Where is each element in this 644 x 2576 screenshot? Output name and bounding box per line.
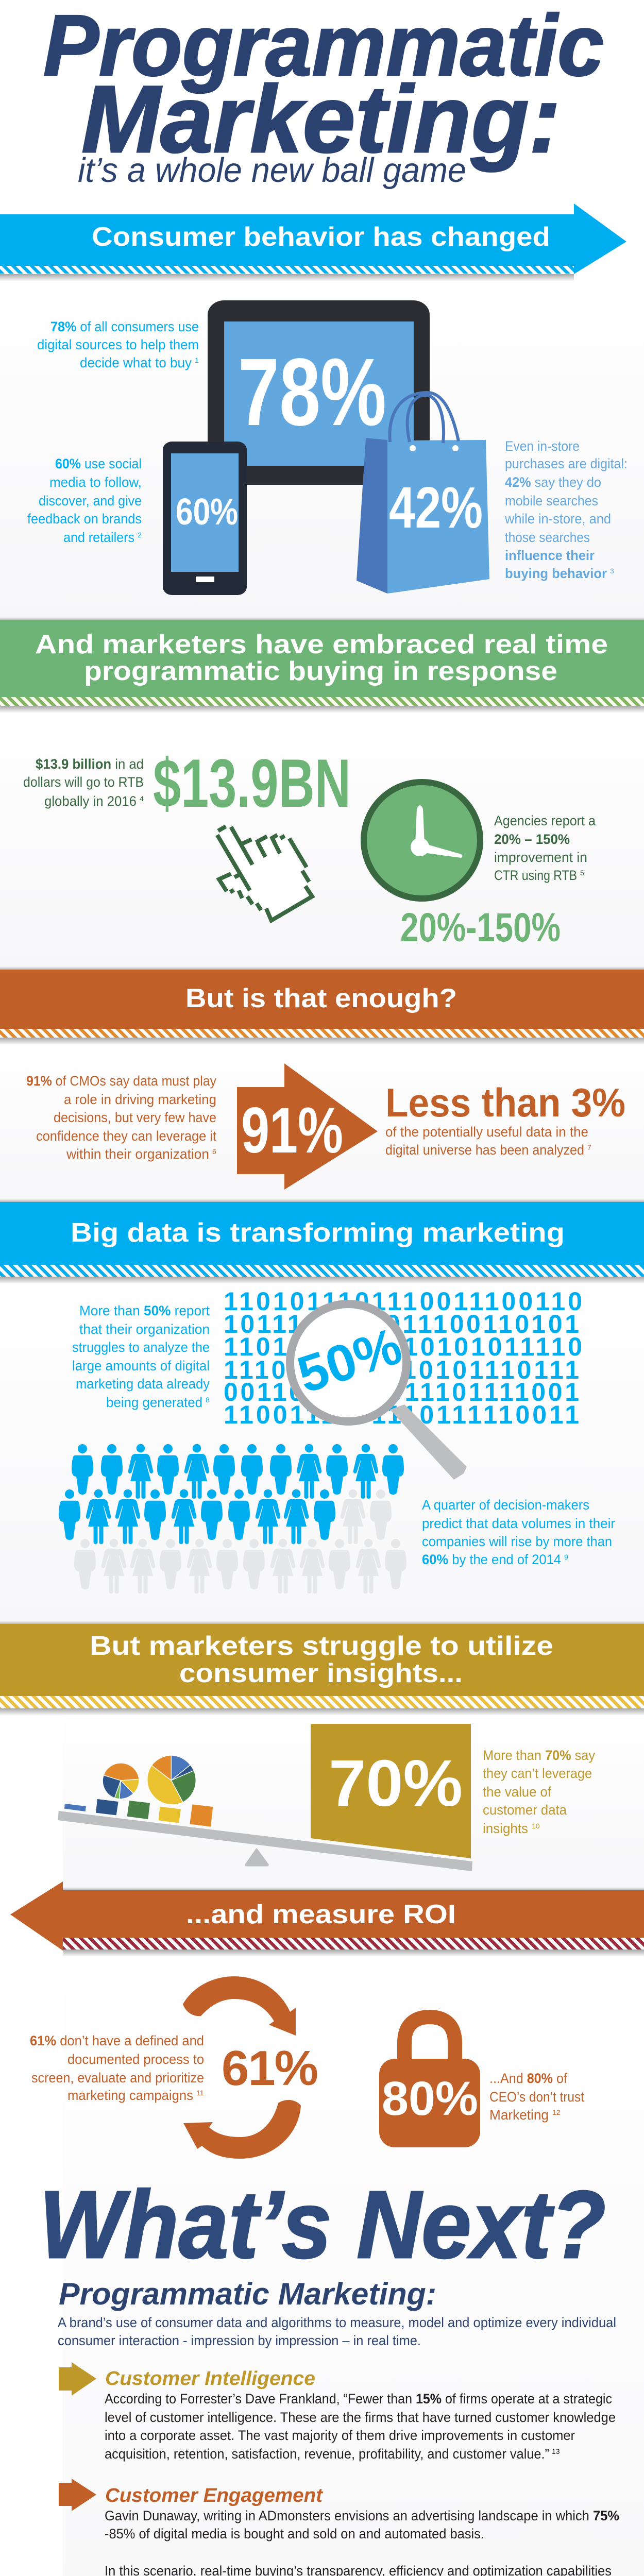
text: agencies report CTR: CTR using RTB bbox=[494, 868, 577, 883]
text: more than 70%: they can’t leverage bbox=[483, 1766, 592, 1781]
text: a quarter of decision-makers: predict that data volumes in their bbox=[422, 1516, 615, 1531]
text: 61% no defined process bbox=[30, 2033, 204, 2103]
icon: magnifying glass with 50% bbox=[290, 1304, 467, 1480]
icon: clock bbox=[364, 782, 480, 899]
title: Marketing: bbox=[81, 66, 561, 173]
body: customer engagement bbox=[104, 2508, 619, 2576]
icon: magnifying glass with 50%: 50% bbox=[291, 1317, 409, 1404]
text: a quarter of decision-makers: A quarter of decision-makers bbox=[422, 1497, 589, 1513]
icon: pixel hand cursor bbox=[217, 826, 313, 921]
banner: big data bbox=[0, 1199, 644, 1284]
text: in-store purchases: buying behavior bbox=[505, 566, 607, 581]
text: 78% of consumers: decide what to buy bbox=[80, 355, 192, 370]
text: 80% of CEOs: ...And 80% of bbox=[489, 2071, 567, 2086]
binary data block: 0011011010011101111001 bbox=[224, 1378, 579, 1406]
text: in-store purchases: while in-store, and bbox=[504, 511, 611, 527]
text: 80% of CEOs: 12 bbox=[552, 2108, 561, 2116]
icon: padlock with 80% bbox=[379, 2017, 480, 2147]
text: 60% use social media: discover, and give bbox=[39, 493, 142, 509]
heading: customer intelligence: Customer Intelligence bbox=[105, 2368, 315, 2389]
text: 61% no defined process: screen, evaluate and prioritize bbox=[31, 2070, 204, 2086]
text: 91% of CMOs bbox=[26, 1073, 216, 1162]
body: customer intelligence: 13 bbox=[552, 2447, 560, 2455]
icon: cycle arrows with 61% bbox=[183, 1976, 318, 2159]
text: agencies report CTR: Agencies report a bbox=[494, 813, 596, 828]
binary data block: 1100111001110111110011 bbox=[224, 1400, 579, 1429]
text: more than 50% bbox=[72, 1303, 210, 1410]
text: more than 50%: 8 bbox=[206, 1396, 210, 1404]
text: in-store purchases bbox=[504, 438, 628, 581]
body: customer intelligence: level of customer intelligence. These are the firms that have turned customer knowledge bbox=[105, 2410, 616, 2425]
text: in-store purchases: purchases are digital: bbox=[505, 456, 628, 471]
text: in-store purchases: 3 bbox=[610, 567, 614, 575]
body: customer intelligence: into a corporate asset. The vast majority of them drive improvements in customer bbox=[105, 2428, 575, 2443]
body: customer intelligence: acquisition, retention, satisfaction, revenue, profitability, and customer value.” bbox=[105, 2446, 549, 2462]
text: in-store purchases: mobile searches bbox=[505, 493, 598, 509]
binary data block: 1110110110110101110111 bbox=[224, 1355, 579, 1384]
text: 91% of CMOs: confidence they can leverage it bbox=[36, 1128, 216, 1144]
pie charts and data blocks bbox=[64, 1755, 213, 1827]
text: more than 70%: the value of bbox=[483, 1784, 551, 1800]
banner: consumer behavior has changed bbox=[0, 204, 626, 281]
body: customer intelligence: According to Forrester’s Dave Frankland, “Fewer than 15% of firms operate at a strategic bbox=[105, 2391, 612, 2406]
icon: tablet with 78%: 78% bbox=[238, 339, 386, 446]
definition: programmatic marketing: Programmatic Marketing: bbox=[59, 2277, 436, 2311]
text: less than 3%: of the potentially useful data in the bbox=[385, 1124, 588, 1140]
text: 91% of CMOs: 6 bbox=[212, 1147, 216, 1156]
text: $13.9 billion: $13.9 billion in ad bbox=[36, 756, 144, 772]
banner: consumer behavior has changed: Consumer behavior has changed bbox=[92, 222, 550, 252]
body: customer engagement: Gavin Dunaway, writing in ADmonsters envisions an advertising landscape in which 75% bbox=[105, 2508, 619, 2523]
banner: struggle to utilize consumer insights: But marketers struggle to utilize bbox=[90, 1631, 553, 1661]
definition: programmatic marketing: consumer interaction - impression by impression – in real time. bbox=[58, 2333, 421, 2348]
text: a quarter of decision-makers: 60% by the end of 2014 bbox=[422, 1552, 561, 1567]
subtitle: it’s a whole new ball game bbox=[78, 151, 466, 190]
body: customer intelligence bbox=[105, 2391, 616, 2462]
text: 60% use social media: media to follow, bbox=[49, 474, 142, 490]
icon: shopping bag with 42%: 42% bbox=[389, 475, 483, 540]
text: more than 50%: More than 50% report bbox=[79, 1303, 210, 1318]
body: customer engagement: -85% of digital media is bought and sold on and automated basis. bbox=[105, 2526, 484, 2541]
binary data block: 1101011101110011100110 bbox=[224, 1287, 582, 1316]
banner: and measure ROI bbox=[10, 1882, 644, 1957]
pictogram: people row 1 bbox=[72, 1444, 404, 1499]
pictogram: people row 2 bbox=[59, 1489, 392, 1544]
icon: phone with 60% bbox=[163, 442, 247, 595]
text: 78% of consumers: digital sources to help them bbox=[37, 337, 199, 352]
icon: padlock with 80%: 80% bbox=[382, 2072, 478, 2125]
text: agencies report CTR bbox=[494, 813, 596, 883]
text: more than 50%: large amounts of digital bbox=[72, 1358, 210, 1374]
text: $13.9 billion bbox=[23, 756, 144, 809]
text: 60% use social media: 60% use social bbox=[55, 456, 142, 471]
icon: arrow with 91% bbox=[237, 1063, 378, 1190]
text: in-store purchases: Even in-store bbox=[505, 438, 580, 454]
banner: struggle to utilize consumer insights: consumer insights... bbox=[179, 1658, 463, 1688]
text: less than 3%: digital universe has been analyzed bbox=[385, 1142, 584, 1158]
banner: but is that enough bbox=[0, 967, 644, 1045]
icon: tablet with 78% bbox=[208, 300, 430, 485]
text: less than 3%: 7 bbox=[587, 1143, 591, 1151]
banner: struggle to utilize consumer insights bbox=[0, 1621, 644, 1716]
chart: seesaw with pies and 70% block: 70% bbox=[329, 1747, 463, 1820]
text: more than 50%: marketing data already bbox=[76, 1376, 210, 1392]
text: $13.9 billion: globally in 2016 bbox=[44, 793, 137, 809]
text: more than 70%: customer data bbox=[483, 1802, 567, 1818]
text: 91% of CMOs: within their organization bbox=[66, 1146, 209, 1162]
banner: and measure ROI: ...and measure ROI bbox=[186, 1900, 456, 1929]
text: agencies report CTR: 5 bbox=[580, 869, 584, 877]
banner: but is that enough: But is that enough? bbox=[185, 984, 457, 1013]
text: 60% use social media bbox=[27, 456, 142, 545]
text: more than 50%: struggles to analyze the bbox=[72, 1340, 210, 1355]
banner: marketers embraced programmatic bbox=[0, 617, 644, 713]
definition: programmatic marketing bbox=[58, 2277, 616, 2348]
text: 60% use social media: feedback on brands bbox=[27, 511, 142, 527]
text: a quarter of decision-makers: 9 bbox=[564, 1553, 568, 1561]
text: more than 50%: that their organization bbox=[79, 1321, 210, 1337]
text: $13.9 billion: 4 bbox=[140, 794, 144, 803]
text: 91% of CMOs: decisions, but very few have bbox=[54, 1110, 216, 1125]
text: 80% of CEOs: Marketing bbox=[489, 2107, 549, 2123]
banner: marketers embraced programmatic: And marketers have embraced real time bbox=[35, 630, 608, 659]
icon: shopping bag with 42% bbox=[357, 393, 489, 594]
text: more than 70%: More than 70% say bbox=[483, 1748, 595, 1763]
text: a quarter of decision-makers bbox=[422, 1497, 615, 1567]
pictogram: people row 3 bbox=[74, 1539, 406, 1594]
definition: programmatic marketing: A brand’s use of consumer data and algorithms to measure, model and optimize every individual bbox=[58, 2315, 616, 2330]
chart: seesaw with pies and 70% block bbox=[58, 1724, 472, 1871]
text: 61% no defined process: documented process to bbox=[67, 2052, 204, 2067]
text: in-store purchases: 42% say they do bbox=[505, 474, 601, 490]
text: more than 50%: being generated bbox=[106, 1395, 202, 1410]
text: $13.9 billion: dollars will go to RTB bbox=[23, 774, 144, 790]
stat: $13.9BN: $13.9BN bbox=[153, 745, 351, 822]
binary data block bbox=[224, 1287, 582, 1429]
binary data block: 1101101100110101011110 bbox=[224, 1332, 582, 1361]
text: 61% no defined process: 61% don’t have a defined and bbox=[30, 2033, 204, 2048]
text: less than 3% bbox=[385, 1080, 625, 1158]
text: 78% of consumers: 1 bbox=[195, 356, 199, 364]
banner: big data: Big data is transforming marketing bbox=[71, 1218, 565, 1248]
binary data block: 1011101011011100110101 bbox=[224, 1310, 579, 1338]
text: 91% of CMOs: a role in driving marketing bbox=[64, 1092, 216, 1107]
icon: cycle arrows with 61%: 61% bbox=[222, 2041, 318, 2096]
text: 78% of consumers bbox=[37, 319, 199, 370]
text: 80% of CEOs bbox=[489, 2071, 584, 2123]
banner: marketers embraced programmatic: programmatic buying in response bbox=[84, 656, 557, 686]
text: agencies report CTR: 20% – 150% bbox=[494, 832, 570, 847]
text: 91% of CMOs: 91% of CMOs say data must play bbox=[26, 1073, 216, 1089]
text: 61% no defined process: 11 bbox=[196, 2089, 204, 2097]
text: in-store purchases: influence their bbox=[505, 548, 595, 563]
heading: customer engagement: Customer Engagement bbox=[105, 2485, 323, 2506]
text: more than 70%: 10 bbox=[532, 1822, 540, 1830]
text: more than 70%: insights bbox=[483, 1821, 528, 1836]
text: less than 3%: Less than 3% bbox=[385, 1080, 625, 1125]
icon: orange arrow bbox=[59, 2479, 96, 2511]
text: 60% use social media: and retailers bbox=[63, 530, 134, 545]
text: 61% no defined process: marketing campaigns bbox=[67, 2088, 193, 2103]
icon: arrow with 91%: 91% bbox=[241, 1095, 343, 1166]
text: 80% of CEOs: CEO’s don’t trust bbox=[489, 2089, 584, 2105]
block: customer intelligence bbox=[59, 2362, 616, 2462]
text: a quarter of decision-makers: companies will rise by more than bbox=[422, 1534, 612, 1549]
text: 60% use social media: 2 bbox=[138, 531, 142, 539]
icon: gold arrow bbox=[59, 2362, 96, 2396]
stat: 20%-150%: 20%-150% bbox=[400, 904, 561, 950]
text: agencies report CTR: improvement in bbox=[494, 850, 587, 865]
icon: phone with 60%: 60% bbox=[176, 492, 238, 533]
heading: what's next: What’s Next? bbox=[39, 2172, 606, 2278]
title bbox=[43, 0, 604, 190]
text: more than 70% bbox=[483, 1748, 595, 1836]
text: 78% of consumers: 78% of all consumers use bbox=[50, 319, 199, 334]
block: customer engagement bbox=[59, 2479, 619, 2576]
text: in-store purchases: those searches bbox=[505, 530, 590, 545]
